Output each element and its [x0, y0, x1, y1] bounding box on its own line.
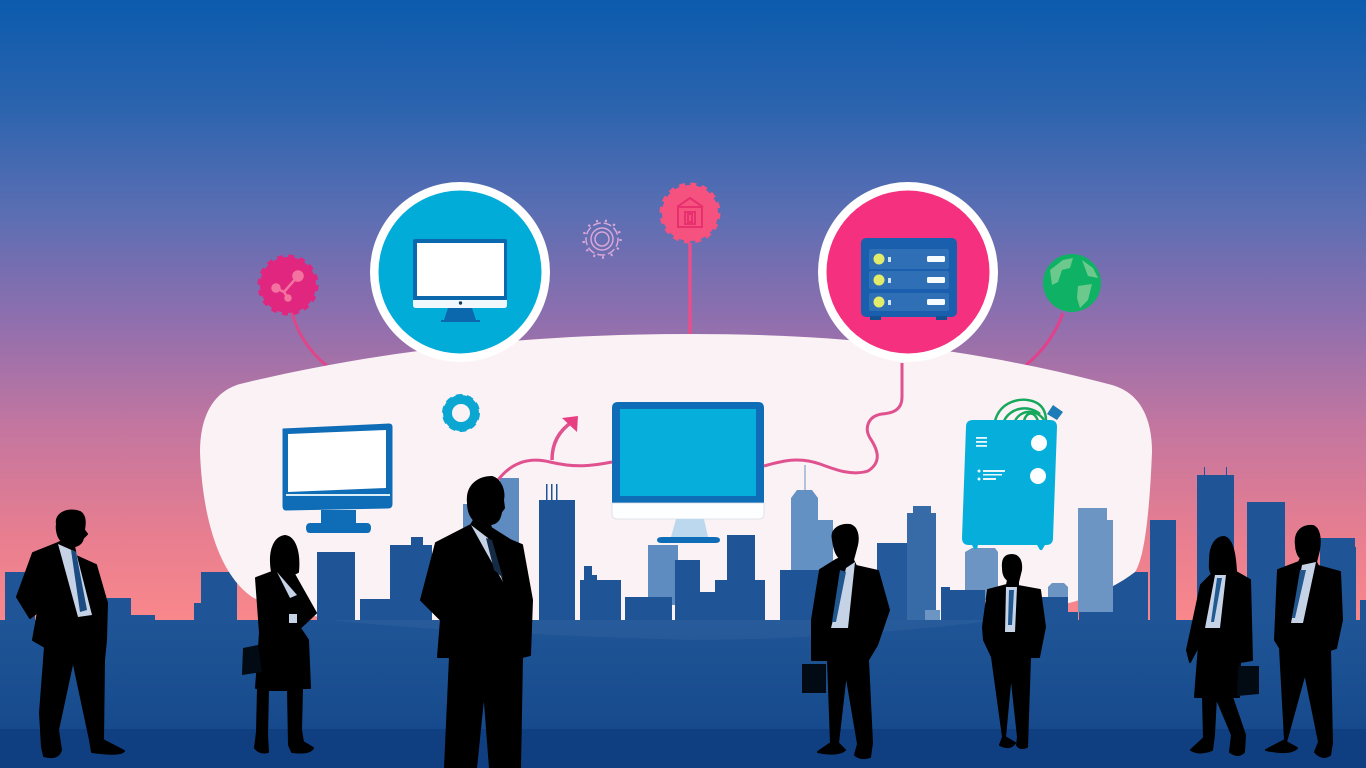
- light towers right: [965, 508, 1113, 612]
- person: woman right: [1187, 537, 1259, 755]
- icon: router device: [962, 400, 1063, 550]
- icon: share nodes: [272, 272, 302, 300]
- connector: left cable with arrow: [498, 416, 612, 480]
- central white panel: [200, 334, 1152, 640]
- arrow head: [562, 416, 578, 432]
- icon: cyan gear: [444, 396, 478, 430]
- person: man far left: [17, 510, 124, 757]
- icon: left monitor: [283, 424, 392, 533]
- person: man far right: [1266, 526, 1342, 757]
- person: large centre man: [421, 477, 532, 768]
- ground: [0, 620, 1366, 730]
- panel lower edge glow: [330, 620, 1000, 640]
- icon: lilac gear ring: [584, 220, 620, 258]
- rear skyline: [5, 467, 1366, 642]
- person: man centre right: [983, 555, 1045, 748]
- front skyline: [317, 465, 1113, 640]
- icon: globe: [1043, 254, 1101, 312]
- light tower with spire: [791, 465, 833, 630]
- icon: central monitor: [612, 402, 764, 543]
- badge: house: [661, 184, 719, 242]
- circle: server: [818, 182, 998, 362]
- circle: desktop: [370, 182, 550, 362]
- person: man with briefcase: [802, 525, 889, 758]
- icon: monitor: [413, 239, 507, 322]
- person: woman left: [242, 536, 316, 752]
- badge: network nodes: [259, 256, 317, 314]
- icon: server rack: [861, 238, 957, 320]
- connector: top badge line: [688, 243, 692, 336]
- dark towers centre right: [780, 506, 940, 630]
- dark towers centre: [625, 535, 765, 637]
- icon: house: [677, 198, 703, 227]
- connector: left badge line: [292, 313, 327, 366]
- connector: right cable: [764, 363, 902, 473]
- connector: globe line: [1026, 313, 1063, 365]
- dark towers right: [941, 587, 1078, 640]
- floor band: [0, 729, 1366, 768]
- green wires: [995, 400, 1046, 421]
- light towers centre left: [463, 478, 678, 624]
- dark towers left: [317, 484, 621, 622]
